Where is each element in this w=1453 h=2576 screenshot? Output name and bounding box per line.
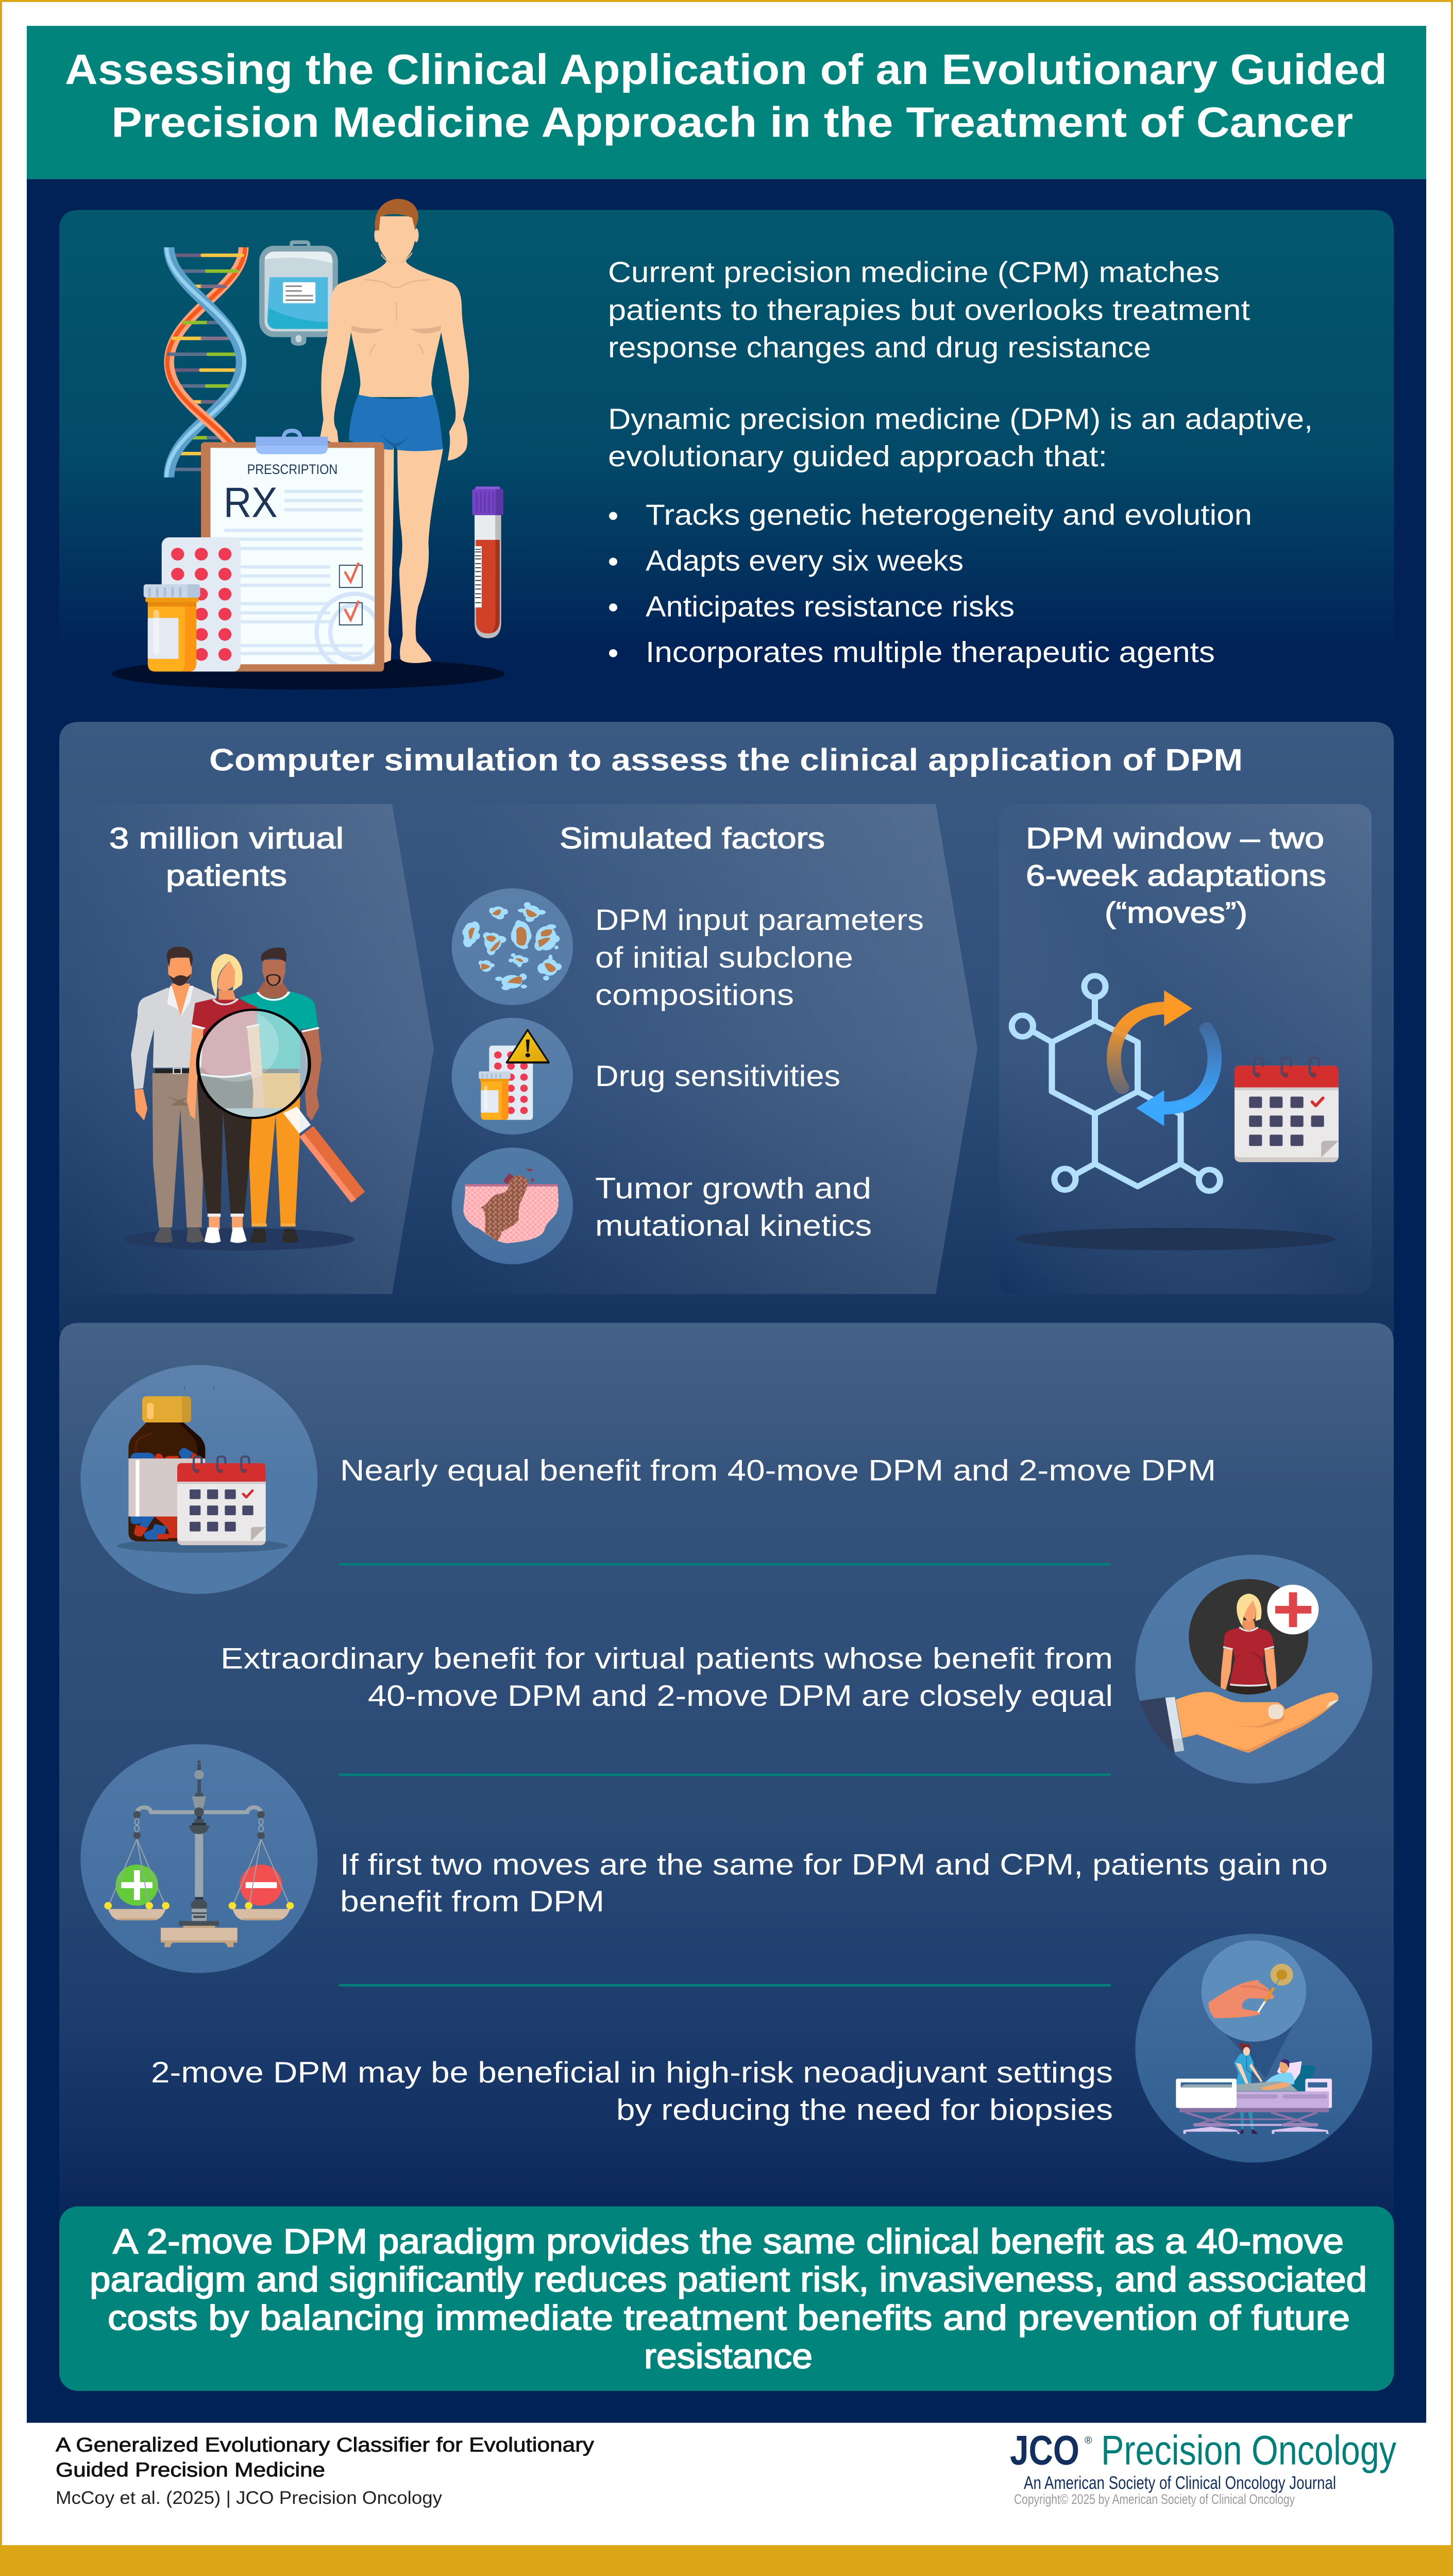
- finding 2 text: Extraordinary benefit for virtual patients whose benefit from: [221, 1642, 1113, 1675]
- text: DPM input parameters: [595, 904, 924, 1011]
- illustration: virtual patients under magnifier: [124, 947, 365, 1250]
- icon: blood vial: [472, 486, 503, 638]
- text: bullet list: Anticipates resistance risks: [646, 590, 1015, 623]
- icon: subclone cells: [452, 888, 573, 1005]
- citation: A Generalized Evolutionary Classifier for Evolutionary: [56, 2434, 594, 2456]
- text: DPM input parameters: compositions: [595, 978, 794, 1011]
- panel: key findings: [59, 1323, 1394, 2219]
- icon: molecule with adaptation arrows: [1012, 976, 1335, 1250]
- title banner: [27, 26, 1426, 179]
- finding 4 text: by reducing the need for biopsies: [616, 2093, 1113, 2126]
- text: drug sensitivities: Drug sensitivities: [595, 1060, 840, 1093]
- callout: conclusion: paradigm and significantly reduces patient risk, invasiveness, and associated: [90, 2260, 1367, 2299]
- panel: computer simulation: [59, 722, 1394, 1333]
- finding 4 icon: biopsy and hospital bed: [1135, 1934, 1372, 2163]
- citation: Guided Precision Medicine: [56, 2459, 325, 2481]
- heading: computer simulation: Computer simulation to assess the clinical application of DPM: [209, 743, 1243, 777]
- icon: DNA helix: [167, 247, 245, 478]
- icon: pill bottle: [144, 584, 200, 671]
- arrow panel: simulated factors: [397, 804, 977, 1294]
- logo: JCO Precision Oncology: An American Society of Clinical Oncology Journal: [1024, 2473, 1336, 2493]
- heading: DPM window: [1026, 822, 1326, 929]
- finding 3 text: If first two moves are the same for DPM and CPM, patients gain no: [340, 1848, 1328, 1881]
- logo: JCO Precision Oncology: JCO: [1010, 2427, 1079, 2473]
- finding 1 text: Nearly equal benefit from 40-move DPM and 2-move DPM: [340, 1454, 1216, 1487]
- heading: DPM window: DPM window – two: [1026, 822, 1324, 855]
- icon: tumor growth: [452, 1147, 573, 1264]
- icon: IV bag: [262, 242, 335, 346]
- finding 3 text: benefit from DPM: [340, 1885, 604, 1918]
- figure: man in teal shirt: [240, 947, 322, 1243]
- text: current precision medicine: response changes and drug resistance: [608, 331, 1151, 364]
- finding 1 icon: medicine bottle and calendar: [80, 1365, 317, 1594]
- finding 4 text: [151, 2056, 1113, 2126]
- arrow panel: virtual patients: [72, 804, 434, 1294]
- finding 3 icon: balance scale: [80, 1744, 317, 1973]
- finding 2 text: [221, 1642, 1113, 1713]
- finding 2 text: 40-move DPM and 2-move DPM are closely equal: [368, 1680, 1113, 1713]
- icon: prescription clipboard: RX: [224, 479, 278, 526]
- heading: 3 million virtual patients: [109, 822, 344, 892]
- icon: drug sensitivities: [452, 1018, 573, 1134]
- text: tumor growth and mutational kinetics: [595, 1172, 872, 1242]
- finding 3 text: [340, 1848, 1328, 1918]
- text: current precision medicine: patients to therapies but overlooks treatment: [608, 294, 1250, 327]
- text: dynamic precision medicine: [608, 403, 1313, 473]
- callout: conclusion: A 2-move DPM paradigm provides the same clinical benefit as a 40-move: [113, 2222, 1344, 2261]
- title banner: Assessing the Clinical Application of an Evolutionary Guided: [65, 45, 1387, 93]
- figure: man in grey shirt: [131, 947, 216, 1243]
- callout: conclusion: [59, 2207, 1394, 2391]
- icon: magnifying glass: [193, 1008, 365, 1202]
- citation: [56, 2434, 594, 2508]
- callout: conclusion: resistance: [644, 2336, 813, 2376]
- icon: prescription clipboard: [201, 431, 392, 671]
- callout: conclusion: costs by balancing immediate treatment benefits and prevention of future: [108, 2298, 1350, 2337]
- figure: male patient: [320, 199, 469, 663]
- citation: McCoy et al. (2025) | JCO Precision Oncology: [56, 2488, 442, 2508]
- text: tumor growth and mutational kinetics: mutational kinetics: [595, 1210, 872, 1242]
- text: dynamic precision medicine: Dynamic precision medicine (DPM) is an adaptive,: [608, 403, 1313, 435]
- text: current precision medicine: [608, 256, 1250, 364]
- icon: calendar: [1235, 1058, 1339, 1162]
- heading: 3 million virtual patients: patients: [166, 859, 287, 892]
- panel: precision medicine intro: [59, 199, 1394, 690]
- illustration: patient, DNA, prescription: [111, 199, 505, 690]
- finding 2 icon: patient in palm of hand: [1135, 1555, 1372, 1784]
- heading: simulated factors: Simulated factors: [560, 822, 825, 855]
- logo: JCO Precision Oncology: [1010, 2427, 1397, 2507]
- heading: DPM window: (“moves”): [1105, 896, 1247, 929]
- logo: JCO Precision Oncology: ®: [1085, 2435, 1092, 2446]
- text: dynamic precision medicine: evolutionary guided approach that:: [608, 440, 1107, 473]
- finding 4 text: 2-move DPM may be beneficial in high-risk neoadjuvant settings: [151, 2056, 1113, 2089]
- text: bullet list: Adapts every six weeks: [646, 545, 964, 577]
- panel: DPM window: [999, 804, 1372, 1294]
- icon: blister pack: [162, 537, 241, 671]
- figure: woman in red shirt: [187, 954, 265, 1243]
- heading: 3 million virtual patients: 3 million virtual: [109, 822, 344, 855]
- icon: prescription clipboard: PRESCRIPTION: [247, 461, 337, 477]
- text: bullet list: [609, 499, 1252, 669]
- text: DPM input parameters: DPM input parameters: [595, 904, 924, 937]
- text: bullet list: Tracks genetic heterogeneity and evolution: [646, 499, 1252, 532]
- title banner: Precision Medicine Approach in the Treatment of Cancer: [111, 98, 1353, 146]
- heading: DPM window: 6-week adaptations: [1026, 859, 1326, 892]
- logo: JCO Precision Oncology: Copyright© 2025 by American Society of Clinical Oncology: [1014, 2491, 1295, 2507]
- text: bullet list: Incorporates multiple therapeutic agents: [646, 636, 1215, 669]
- text: current precision medicine: Current precision medicine (CPM) matches: [608, 256, 1220, 289]
- text: tumor growth and mutational kinetics: Tumor growth and: [595, 1172, 871, 1205]
- bottom gold band: [0, 2545, 1453, 2576]
- text: DPM input parameters: of initial subclone: [595, 941, 853, 974]
